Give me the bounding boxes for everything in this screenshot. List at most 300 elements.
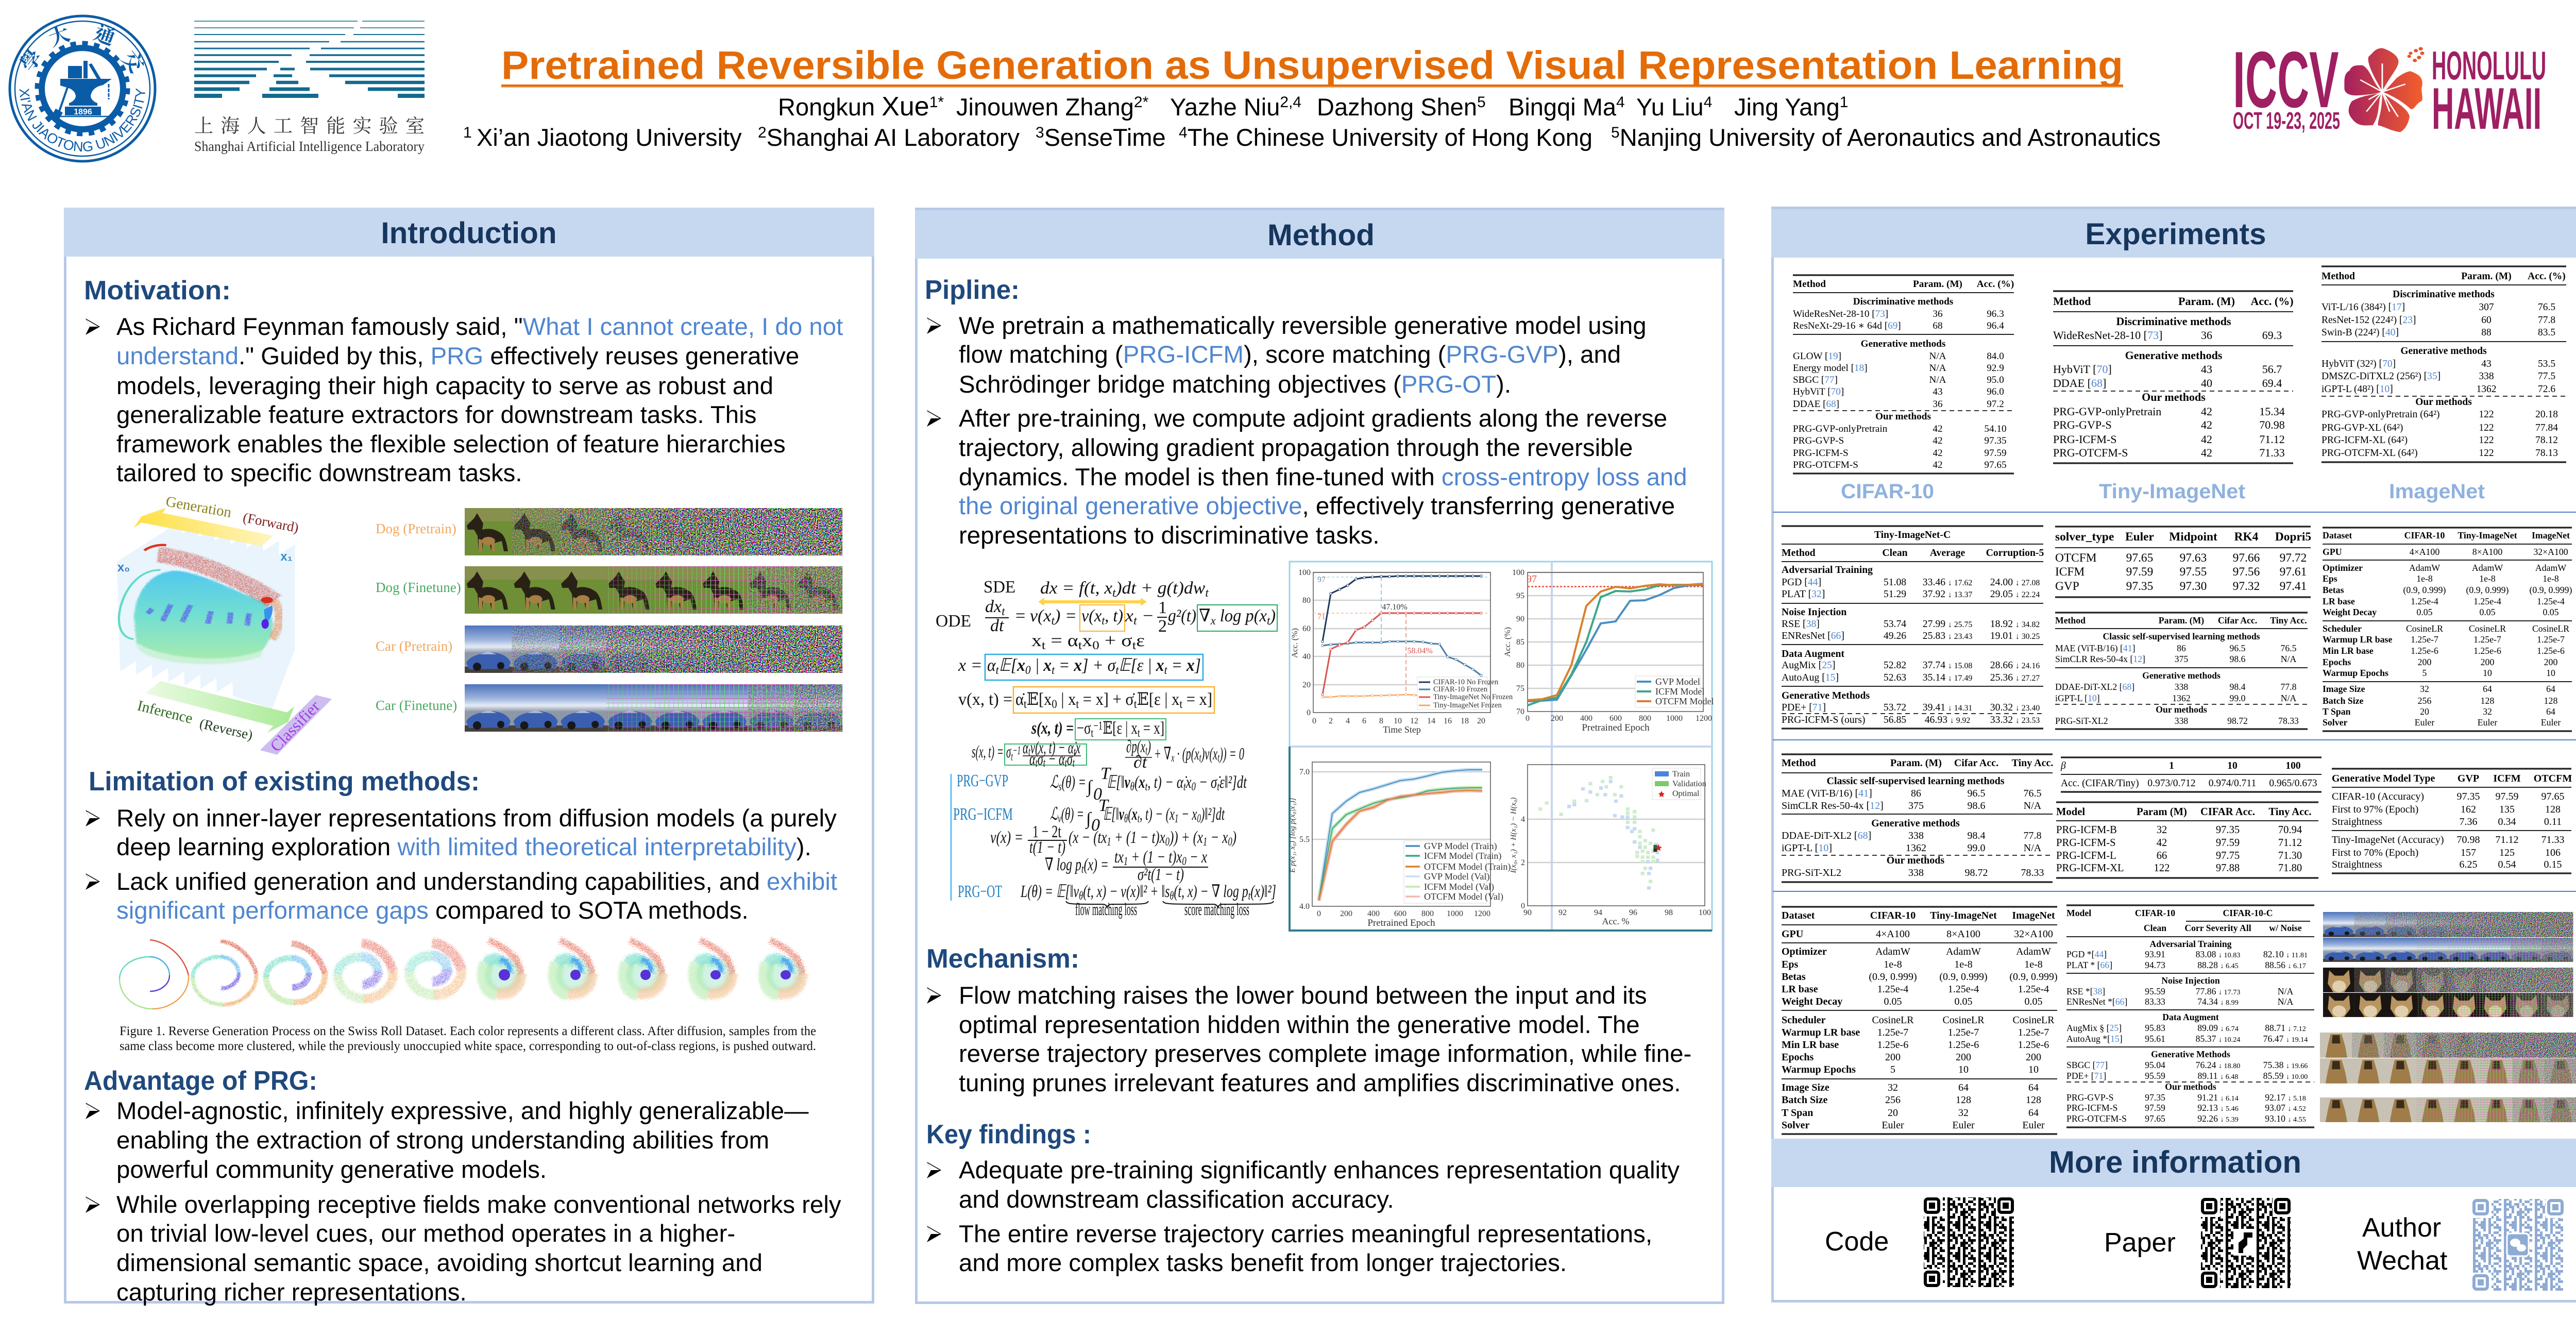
authors: Dazhong Shen <box>1317 93 1477 121</box>
table: ODE solver comparison: Dopri5 <box>2275 530 2311 544</box>
table: beta sensitivity: 10 <box>2227 760 2238 771</box>
table: training settings: 8×A100 <box>2472 547 2502 557</box>
table: ODE solver comparison: 97.41 <box>2280 580 2307 593</box>
equations: = x] <box>1140 719 1164 738</box>
equations: 0 <box>1192 780 1196 793</box>
table: training settings: Batch Size <box>2323 696 2364 706</box>
text block: advantages: Model-agnostic, infinitely expressive, and highly generalizable— <box>116 1097 809 1125</box>
table: training settings large: T Span <box>1782 1107 1813 1119</box>
table: CIFAR-10 results: 96.3 <box>1987 309 2004 319</box>
table: training settings large: Weight Decay <box>1782 996 1842 1007</box>
table: training settings large: Eps <box>1782 959 1798 970</box>
chart: mutual information scatter: Validation <box>1672 780 1706 788</box>
text block: advantages: on trivial low-level cues, our method operates in a higher- <box>116 1220 735 1247</box>
table: Tiny-ImageNet-C robustness: 25.36 ↓ 27.27 <box>1990 672 2040 683</box>
label and QR code: Author Wechat <box>2357 1197 2566 1293</box>
table: Tiny-ImageNet results: 40 <box>2201 377 2212 390</box>
table: ImageNet results: 77.8 <box>2538 315 2555 326</box>
table: self-supervised comparison: 338 <box>2175 716 2188 726</box>
table: training settings large: 1e-8 <box>1884 959 1902 970</box>
table: training settings: (0.9, 0.999) <box>2466 585 2509 596</box>
table: CIFAR-10 results: WideResNet-28-10 [73] <box>1793 309 1888 319</box>
label and QR code: Code <box>1825 1196 2016 1290</box>
equations: θ <box>1170 889 1174 903</box>
diagram: generation and inference planes: Generation <box>164 493 233 521</box>
table: Tiny-ImageNet results: 43 <box>2201 363 2212 376</box>
table: CIFAR-10-C robustness: 88.28 ↓ 6.45 <box>2197 960 2239 970</box>
table: training settings large: 1.25e-4 <box>2018 984 2049 995</box>
table: self-supervised comparison: Param. (M) <box>2159 615 2204 625</box>
authors: Yazhe Niu <box>1170 93 1280 121</box>
authors: Bingqi Ma <box>1509 93 1617 121</box>
equations: (x) = <box>1083 855 1109 874</box>
table: CIFAR-10 results: 95.0 <box>1987 375 2004 385</box>
table: CIFAR-10-C robustness: N/A <box>2278 996 2293 1007</box>
chart: mutual information scatter: 96 <box>1629 908 1637 917</box>
table: Tiny-ImageNet results: 42 <box>2201 405 2212 418</box>
table: training settings: Betas <box>2323 585 2344 595</box>
table: ODE solver comparison: Midpoint <box>2169 530 2217 544</box>
table: ODE solver comparison: 97.61 <box>2280 565 2307 579</box>
table: generative model type: 71.33 <box>2541 834 2565 845</box>
table: generative model type: 128 <box>2545 804 2561 815</box>
equations: − x <box>1207 828 1228 847</box>
table: Tiny-ImageNet-C robustness: 27.99 ↓ 25.75 <box>1923 618 1972 630</box>
chart: accuracy vs pretrained epoch: 0 <box>1526 714 1530 723</box>
equations: v <box>1058 812 1061 825</box>
figure caption <box>120 1024 816 1053</box>
table: Tiny-ImageNet-C robustness: 30.32 ↓ 23.40 <box>1990 702 2040 713</box>
table: Tiny-ImageNet-C robustness: 25.83 ↓ 23.43 <box>1923 630 1972 641</box>
table: self-supervised comparison large: Our methods <box>1887 855 1944 866</box>
table: self-supervised comparison large: 99.0 <box>1967 842 1986 854</box>
text block: motivation: As Richard Feynman famously said, "What I cannot create, I do not <box>116 313 843 341</box>
table: training settings large: 1.25e-6 <box>1877 1039 1908 1051</box>
equations: − σ̇ <box>1196 773 1221 792</box>
equations: t <box>1074 745 1076 758</box>
table: Tiny-ImageNet results: WideResNet-28-10 [73] <box>2053 329 2162 342</box>
chart: accuracy vs pretrained epoch: 75 <box>1516 684 1524 693</box>
chart: accuracy vs pretrained epoch: Pretrained Epoch <box>1582 722 1650 733</box>
table: training settings: 10 <box>2546 668 2555 678</box>
table: generative model type: 125 <box>2499 847 2515 858</box>
table: CIFAR-10 results: Method <box>1793 279 1826 290</box>
authors: Xue <box>882 92 929 122</box>
table: Tiny-ImageNet-C robustness: AutoAug [15] <box>1782 672 1839 683</box>
table: CIFAR-10-C robustness: 83.08 ↓ 10.83 <box>2196 949 2240 959</box>
table: CIFAR-10 results: GLOW [19] <box>1793 351 1841 362</box>
table: training settings: 1.25e-6 <box>2411 646 2438 656</box>
subheading: Advantage of PRG: Advantage of PRG: <box>84 1066 317 1096</box>
equations: T <box>1100 764 1111 783</box>
table: CIFAR-10-C robustness: 97.59 <box>2145 1103 2165 1113</box>
table: training settings large: CosineLR <box>1942 1014 1985 1026</box>
table: self-supervised comparison: iGPT-L [10] <box>2055 693 2100 703</box>
chart: accuracy vs time step: 2 <box>1329 717 1333 725</box>
table: CIFAR-10-C robustness: 93.07 ↓ 4.52 <box>2265 1103 2306 1113</box>
table: training settings large: Batch Size <box>1782 1094 1828 1106</box>
chart: accuracy vs pretrained epoch: 90 <box>1516 615 1524 623</box>
equations: t <box>1101 614 1105 628</box>
affiliations: SenseTime <box>1044 124 1166 151</box>
equations: t <box>1199 751 1201 765</box>
table: Tiny-ImageNet-C robustness: Generative Methods <box>1782 690 1870 701</box>
table: self-supervised comparison: SimCLR Res-50-4x [12] <box>2055 654 2145 664</box>
table: CIFAR-10 results: Discriminative methods <box>1853 296 1953 307</box>
table: CIFAR-10 results: HybViT [70] <box>1793 386 1844 397</box>
table: CIFAR-10-C robustness: 95.59 <box>2145 1071 2165 1081</box>
authors: Yu Liu <box>1636 93 1704 121</box>
panel: Introduction <box>64 208 874 1306</box>
affiliations: 2 <box>758 124 767 141</box>
equations: ∂p(x <box>1126 737 1157 756</box>
equations: v(x <box>1081 606 1103 625</box>
text block: pipeline: trajectory, allowing gradient propagation through the reversible <box>959 434 1633 462</box>
table: PRG-ICFM model sizes: 70.94 <box>2278 824 2302 836</box>
table: PRG-ICFM model sizes: CIFAR Acc. <box>2200 806 2255 818</box>
table: ImageNet results: 1362 <box>2476 384 2497 395</box>
chart: log likelihood vs pretrained epoch: GVP Model (Val) <box>1424 871 1489 882</box>
equations: t <box>1078 639 1082 652</box>
table: CIFAR-10 results: 42 <box>1933 448 1943 459</box>
equations: )) + (x <box>1169 828 1203 847</box>
chart: log likelihood vs pretrained epoch: Pretrained Epoch <box>1367 918 1435 928</box>
equations: t <box>1134 698 1137 711</box>
table: ImageNet results: 122 <box>2479 422 2494 433</box>
equations: + ∇ <box>1154 745 1182 764</box>
table: generative model type: 6.25 <box>2460 859 2477 870</box>
table: CIFAR-10-C robustness: 75.38 ↓ 19.66 <box>2263 1060 2308 1070</box>
equations: ε‖²]dt <box>1219 773 1247 792</box>
text block: advantages: enabling the extraction of strong understanding abilities from <box>116 1127 769 1154</box>
table: self-supervised comparison: Method <box>2055 615 2086 625</box>
equations: t <box>1002 605 1005 618</box>
text block: key findings: and downstream classification accuracy. <box>959 1186 1394 1213</box>
equations: ∫ <box>1086 777 1093 798</box>
table: CIFAR-10-C robustness: 93.10 ↓ 4.55 <box>2265 1113 2306 1124</box>
table: PRG-ICFM model sizes: 32 <box>2157 824 2167 836</box>
table: Tiny-ImageNet results: 71.33 <box>2259 446 2285 459</box>
table: training settings: 1e-8 <box>2416 573 2433 584</box>
table: CIFAR-10-C robustness: 88.71 ↓ 7.12 <box>2265 1023 2306 1033</box>
table: training settings: Solver <box>2323 717 2348 728</box>
equations: + σ <box>1099 631 1132 650</box>
table: ImageNet results: 77.84 <box>2535 422 2558 433</box>
table: Tiny-ImageNet results: Method <box>2053 295 2091 308</box>
equations: x <box>1210 614 1216 628</box>
equations: t <box>1052 614 1055 628</box>
equations: t <box>1076 698 1079 711</box>
table: ODE solver comparison: RK4 <box>2234 530 2259 544</box>
table: training settings large: Warmup LR base <box>1782 1027 1860 1038</box>
equations: ( <box>1128 805 1132 824</box>
table: self-supervised comparison large: 375 <box>1908 800 1924 811</box>
chart: log likelihood vs pretrained epoch: 200 <box>1340 909 1352 918</box>
equations: )v(x <box>1200 745 1217 764</box>
table: CIFAR-10 results: DDAE [68] <box>1793 399 1839 410</box>
table: training settings large: Euler <box>1952 1120 1975 1131</box>
chart: accuracy vs time step: 80 <box>1302 596 1311 605</box>
panel: Experiments: Experiments <box>2085 217 2266 251</box>
table: CIFAR-10 results: Energy model [18] <box>1793 363 1868 374</box>
table: training settings: Weight Decay <box>2323 607 2377 617</box>
text block: motivation: tailored to specific downstream tasks. <box>116 460 522 487</box>
equations: ε <box>1136 631 1145 650</box>
equations: (θ) = <box>1061 805 1084 824</box>
table: ImageNet results: PRG-OTCFM-XL (64²) <box>2321 448 2418 459</box>
chart: mutual information scatter: 2 <box>1521 858 1525 867</box>
logo: Shanghai AI Laboratory: Shanghai Artificial Intelligence Laboratory <box>194 139 425 154</box>
logo: Shanghai AI Laboratory <box>194 21 425 154</box>
text block: mechanism: tuning prunes irrelevant features and amplifies discriminative ones. <box>959 1070 1681 1097</box>
text block: mechanism: optimal representation hidden within the generative model. The <box>959 1011 1640 1039</box>
equations: ℒ <box>1050 805 1062 824</box>
equations: t <box>1024 698 1027 711</box>
chart: mutual information scatter: 90 <box>1523 908 1532 917</box>
equations: t <box>1183 780 1186 793</box>
table: generative model type: 135 <box>2499 804 2515 815</box>
table: self-supervised comparison: Tiny Acc. <box>2270 615 2307 625</box>
table: ImageNet results: DMSZC-DiTXL2 (256²) [35] <box>2321 371 2441 382</box>
table: beta sensitivity: β <box>2060 760 2066 771</box>
text block: advantages: dimensional semantic space, avoiding shortcut learning and <box>116 1249 762 1277</box>
chart: accuracy vs time step: 18 <box>1461 717 1469 725</box>
table: ODE solver comparison: GVP <box>2055 580 2079 593</box>
table: generative model type: 106 <box>2545 847 2561 858</box>
chart: accuracy vs time step: 16 <box>1444 717 1452 725</box>
table: generative model type: 97.65 <box>2541 791 2565 802</box>
table: ODE solver comparison: 97.63 <box>2180 551 2207 565</box>
table: training settings: AdamW <box>2472 563 2503 573</box>
table: self-supervised comparison large: 86 <box>1911 788 1921 799</box>
table: ImageNet results: ViT-L/16 (384²) [17] <box>2321 302 2405 313</box>
text block: pipeline: dynamics. The model is then fine-tuned with cross-entropy loss and <box>959 464 1687 491</box>
table: Tiny-ImageNet-C robustness: 35.14 ↓ 17.49 <box>1923 672 1972 683</box>
table: CIFAR-10 results: N/A <box>1929 375 1946 385</box>
text block: motivation: understand." Guided by this, PRG effectively reuses generative <box>116 343 799 370</box>
chart: log likelihood vs pretrained epoch: ICFM Model (Train) <box>1424 851 1501 861</box>
table: training settings large: 128 <box>2026 1094 2041 1106</box>
figure caption: same class become more clustered, while the previously unoccupied white space, corresponding to out-of-class regions, is pushed outward. <box>120 1039 816 1053</box>
table: training settings large <box>1782 907 2058 1134</box>
table: self-supervised comparison: N/A <box>2281 654 2296 664</box>
table: training settings large: GPU <box>1782 928 1803 940</box>
table: ImageNet results: 77.5 <box>2538 371 2555 382</box>
table: PRG-ICFM model sizes: Param (M) <box>2137 806 2187 818</box>
chart: accuracy vs time step: 60 <box>1302 624 1311 633</box>
equations: | <box>1031 656 1043 675</box>
table: training settings: AdamW <box>2535 563 2566 573</box>
table: PRG-ICFM model sizes: PRG-ICFM-B <box>2056 824 2117 836</box>
equations: x <box>1016 656 1025 675</box>
table: training settings large: Solver <box>1782 1120 1810 1131</box>
table: Tiny-ImageNet-C robustness: Noise Injection <box>1782 606 1846 618</box>
authors: 5 <box>1477 94 1486 111</box>
figure: dog and car trajectories: Car (Pretrain) <box>376 638 452 654</box>
table: training settings: CosineLR <box>2469 623 2506 634</box>
chart: accuracy vs time step: 100 <box>1298 568 1311 577</box>
equations: (x)‖²] <box>1250 882 1276 901</box>
table: ImageNet results: Acc. (%) <box>2528 271 2566 282</box>
equations: α <box>987 656 996 675</box>
heading: Experiments <box>1771 209 2576 258</box>
logo: ICCV Honolulu Hawaii: OCT 19-23, 2025 <box>2233 107 2340 134</box>
table: CIFAR-10-C robustness: 74.34 ↓ 8.99 <box>2197 996 2239 1007</box>
table: self-supervised comparison large <box>1782 754 2053 882</box>
table: Tiny-ImageNet results <box>2053 291 2294 463</box>
table: training settings large: Euler <box>2022 1120 2045 1131</box>
figure caption: Figure 1. Reverse Generation Process on the Swiss Roll Dataset. Each color represents a different class. After diffusion, samples from the <box>120 1024 816 1038</box>
authors: Rongkun <box>778 93 882 121</box>
table: Tiny-ImageNet results: PRG-OTCFM-S <box>2053 446 2128 459</box>
table: training settings large: 32×A100 <box>2014 928 2053 940</box>
chart: accuracy vs time step <box>1291 568 1513 735</box>
table: training settings large: (0.9, 0.999) <box>1869 971 1917 983</box>
table: CIFAR-10 results: 42 <box>1933 435 1943 446</box>
table: CIFAR-10 results: 97.65 <box>1984 460 2007 470</box>
table: CIFAR-10-C robustness: 91.21 ↓ 6.14 <box>2197 1092 2239 1103</box>
equations: t <box>1043 756 1045 770</box>
table: beta sensitivity: Acc. (CIFAR/Tiny) <box>2061 778 2139 789</box>
equations: t <box>1179 698 1183 711</box>
table: generative model type: 0.54 <box>2498 859 2516 870</box>
equations: 0 <box>1197 812 1201 825</box>
table: training settings large: CosineLR <box>1872 1014 1914 1026</box>
equations: tx <box>1114 848 1127 867</box>
equations: 0 <box>1165 835 1170 849</box>
chart: accuracy vs pretrained epoch: 400 <box>1580 714 1592 723</box>
table: self-supervised comparison large: 98.4 <box>1967 830 1986 841</box>
chart: accuracy vs pretrained epoch: 1000 <box>1666 714 1683 723</box>
table: self-supervised comparison large: 77.8 <box>2024 830 2041 841</box>
table: training settings large: Betas <box>1782 971 1806 983</box>
table: Tiny-ImageNet-C robustness: 53.74 <box>1884 618 1906 630</box>
table: CIFAR-10-C robustness: Our methods <box>2165 1081 2216 1092</box>
table: training settings: 32 <box>2420 684 2429 694</box>
table: Tiny-ImageNet results: 42 <box>2201 446 2212 459</box>
table: self-supervised comparison large: Tiny Acc. <box>2012 757 2053 769</box>
equations: + (1 − t)x <box>1111 828 1165 847</box>
table: CIFAR-10-C robustness: 92.26 ↓ 5.39 <box>2197 1113 2239 1124</box>
table: generative model type: 0.15 <box>2544 859 2562 870</box>
chart: mutual information scatter: I(x₀, x₁) + H(x₁) − H(x₀) <box>1510 798 1518 873</box>
heading: More information: More information <box>2049 1145 2301 1179</box>
equations: t <box>1132 639 1137 652</box>
table: PRG-ICFM model sizes: PRG-ICFM-L <box>2056 850 2116 861</box>
table: training settings large: 0.05 <box>1884 996 1902 1007</box>
equations: PRG−GVP <box>957 771 1008 790</box>
table: CIFAR-10-C robustness: w/ Noise <box>2269 923 2302 933</box>
table: training settings large: (0.9, 0.999) <box>2009 971 2058 983</box>
equations: (t, x) − v(x)‖² + ‖s <box>1083 882 1170 901</box>
equations: t <box>1052 664 1055 677</box>
chart: accuracy vs pretrained epoch: ICFM Model <box>1655 686 1705 697</box>
table: ImageNet results: 307 <box>2479 302 2494 313</box>
heading: Introduction <box>64 208 874 257</box>
chart: accuracy vs time step: 6 <box>1362 717 1366 725</box>
table: beta sensitivity: 100 <box>2285 760 2301 771</box>
text block: motivation: models, leveraging their high capacity to serve as robust and <box>116 373 773 400</box>
equations: x <box>1125 606 1133 625</box>
chart: accuracy vs time step: 47.10% <box>1382 603 1408 612</box>
table: training settings: Euler <box>2478 717 2497 728</box>
figure: dog and car trajectories: Dog (Finetune) <box>376 580 461 595</box>
equations: − <box>1137 606 1154 625</box>
text block: advantages: powerful community generative models. <box>116 1156 547 1183</box>
table: self-supervised comparison large: PRG-SiT-XL2 <box>1782 867 1841 878</box>
table: training settings: 1e-8 <box>2479 573 2496 584</box>
affiliations: 5 <box>1611 124 1620 141</box>
equations: ) <box>1269 606 1276 625</box>
table: training settings: (0.9, 0.999) <box>2403 585 2446 596</box>
table: ImageNet results: 76.5 <box>2538 302 2555 313</box>
affiliations: 4 <box>1179 124 1188 141</box>
chart: accuracy vs time step: 58.04% <box>1407 647 1433 655</box>
equations: T <box>1098 796 1109 815</box>
table: self-supervised comparison: 86 <box>2177 643 2186 653</box>
table: training settings: 1.25e-7 <box>2473 634 2501 645</box>
equations: ∫ <box>1085 809 1092 830</box>
table: training settings: Dataset <box>2323 530 2352 540</box>
table: CIFAR-10-C robustness: PDE+ [71] <box>2066 1071 2106 1081</box>
table: self-supervised comparison: PRG-SiT-XL2 <box>2055 716 2108 726</box>
equations: = <box>1167 656 1187 675</box>
figure: dog and car trajectories: Dog (Pretrain) <box>376 521 456 536</box>
equations: t <box>1112 586 1116 600</box>
affiliations: Nanjing University of Aeronautics and Astronautics <box>1620 124 2161 151</box>
chart: log likelihood vs pretrained epoch: 400 <box>1367 909 1380 918</box>
table: CIFAR-10 results: 97.35 <box>1984 435 2007 446</box>
chart: accuracy vs pretrained epoch: 200 <box>1551 714 1563 723</box>
table: CIFAR-10 results: 36 <box>1933 309 1943 319</box>
table: Tiny-ImageNet-C robustness: ENResNet [66] <box>1782 630 1844 641</box>
table: CIFAR-10 results: 96.0 <box>1987 386 2004 397</box>
table: CIFAR-10-C robustness: 95.04 <box>2145 1060 2165 1070</box>
table: training settings large: AdamW <box>2016 946 2051 957</box>
table: Tiny-ImageNet-C robustness: PLAT [32] <box>1782 588 1825 600</box>
chart: mutual information scatter: 4 <box>1521 815 1525 824</box>
table: training settings: Euler <box>2541 717 2561 728</box>
equations: σ̇ <box>1067 750 1076 769</box>
table: Tiny-ImageNet results: PRG-ICFM-S <box>2053 433 2116 446</box>
dataset labels: Tiny-ImageNet <box>2099 480 2245 503</box>
table: training settings: 256 <box>2418 696 2431 706</box>
equations: 𝔼[ <box>999 656 1018 675</box>
chart: accuracy vs time step: 20 <box>1302 681 1311 689</box>
equations: t <box>1164 664 1167 677</box>
table: training settings: T Span <box>2323 706 2351 717</box>
logo: ICCV Honolulu Hawaii: ICCV <box>2233 35 2339 124</box>
equations: 𝔼[x <box>1027 690 1052 709</box>
table: Tiny-ImageNet results: 70.98 <box>2259 418 2285 431</box>
equations: SDE <box>984 578 1015 597</box>
equations: 0 <box>1093 785 1102 804</box>
table: ImageNet results: ResNet-152 (224²) [23] <box>2321 315 2416 326</box>
equations: (t, x) − ∇ log p <box>1174 882 1248 901</box>
table: CIFAR-10-C robustness: Data Augment <box>2162 1012 2219 1022</box>
equations: σ <box>1038 750 1044 769</box>
equations: 𝔼[ε | x <box>1103 719 1138 738</box>
table: Tiny-ImageNet results: DDAE [68] <box>2053 377 2106 390</box>
equations: t(1 − t) <box>1029 838 1065 857</box>
table: CIFAR-10 results: 92.9 <box>1987 363 2004 374</box>
table: self-supervised comparison large: 98.6 <box>1967 800 1986 811</box>
table: Tiny-ImageNet-C robustness: Adversarial Training <box>1782 564 1873 576</box>
table: Tiny-ImageNet-C robustness: 33.32 ↓ 23.53 <box>1990 714 2040 725</box>
text block: pipeline: representations to discriminative tasks. <box>959 522 1380 549</box>
chart: mutual information scatter: 98 <box>1665 908 1673 917</box>
equations: x <box>1075 738 1080 757</box>
